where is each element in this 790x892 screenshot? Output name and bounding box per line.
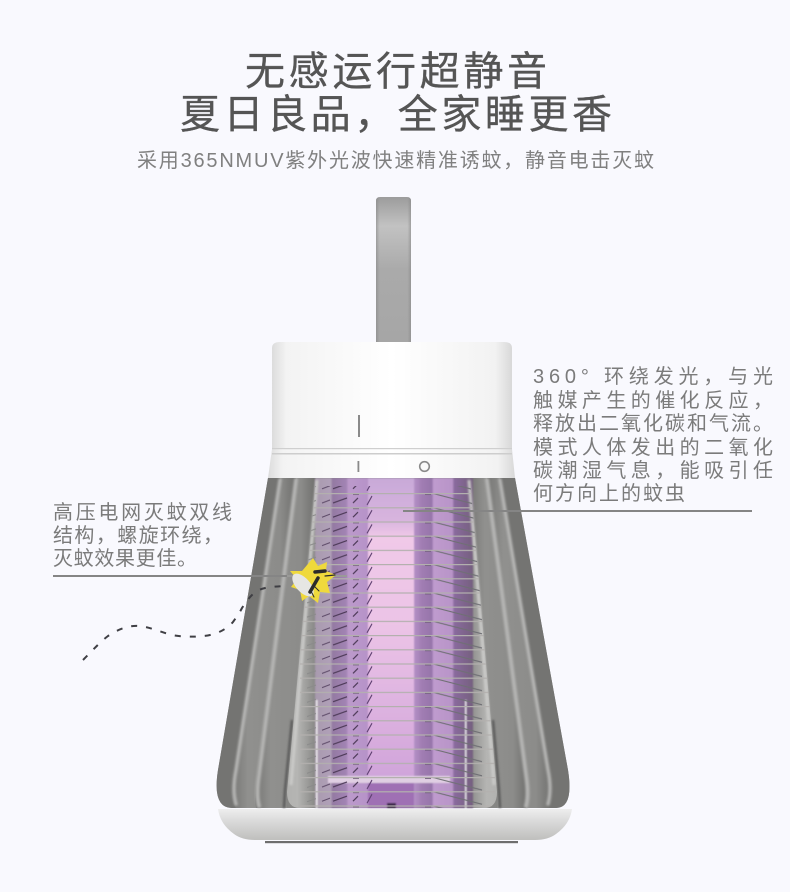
subtitle: 采用365NMUV紫外光波快速精准诱蚊，静音电击灭蚊 bbox=[137, 149, 654, 172]
right callout text: 模式人体发出的二氧化 bbox=[533, 436, 773, 459]
right callout text bbox=[533, 365, 773, 505]
lower band and block bbox=[328, 776, 450, 783]
left leader line bbox=[53, 575, 347, 577]
switch collar bbox=[268, 448, 515, 478]
right callout text: 释放出二氧化碳和气流。 bbox=[533, 412, 773, 435]
lamp handle bbox=[376, 197, 411, 342]
dark gaps beside the glass bbox=[284, 720, 500, 808]
purple inner column bbox=[315, 478, 473, 808]
right callout text: 触媒产生的催化反应， bbox=[533, 389, 773, 412]
glowing pink core bbox=[368, 478, 414, 778]
electric mesh wires bbox=[287, 486, 497, 808]
power on mark bbox=[358, 461, 359, 472]
power off mark bbox=[420, 462, 429, 471]
title: 夏日良品，全家睡更香 bbox=[180, 93, 612, 137]
glass tube bbox=[287, 478, 497, 808]
lamp product illustration bbox=[217, 197, 572, 843]
title: 无感运行超静音 bbox=[245, 50, 547, 94]
yellow spark star bbox=[290, 558, 336, 603]
indicator slot bbox=[358, 415, 360, 437]
left callout text: 灭蚊效果更佳。 bbox=[53, 547, 197, 570]
mosquito body bbox=[310, 571, 335, 597]
mosquito wing bbox=[288, 570, 318, 600]
left callout text bbox=[53, 501, 232, 570]
lamp base bbox=[218, 809, 572, 843]
right callout text: 何方向上的蚊虫 bbox=[533, 482, 685, 505]
right callout text: 碳潮湿气息，能吸引任 bbox=[533, 459, 773, 482]
glass highlight strokes bbox=[291, 480, 494, 785]
lamp top cap bbox=[272, 342, 512, 448]
grey ribbed cage body bbox=[217, 478, 570, 808]
rib highlights bbox=[234, 480, 550, 806]
zapped mosquito icon bbox=[288, 558, 336, 603]
right callout text: 360° 环绕发光，与光 bbox=[533, 365, 773, 388]
left callout text: 结构，螺旋环绕， bbox=[53, 524, 223, 547]
mosquito flight path bbox=[83, 586, 284, 660]
title bbox=[180, 50, 612, 137]
right leader line bbox=[403, 510, 752, 512]
left callout text: 高压电网灭蚊双线 bbox=[53, 501, 232, 524]
